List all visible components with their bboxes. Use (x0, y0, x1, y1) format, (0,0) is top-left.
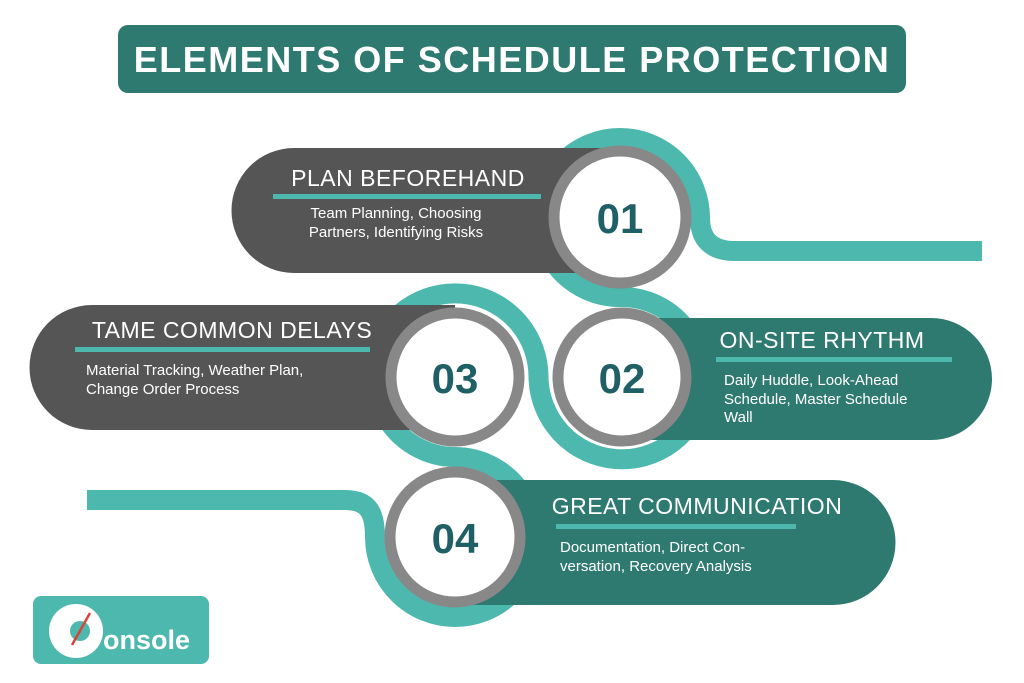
title (118, 25, 906, 93)
title: ELEMENTS OF SCHEDULE PROTECTION (134, 39, 890, 80)
panel: 02 on-site rhythm (622, 318, 992, 440)
panel: 04 great communication: GREAT COMMUNICATION (552, 493, 842, 519)
panel: 02 on-site rhythm: Daily Huddle, Look-Ahead (724, 372, 898, 389)
badge 04: 04 (432, 515, 479, 562)
badge 03: 03 (432, 355, 478, 402)
panel: 02 on-site rhythm: Wall (724, 409, 753, 426)
panel: 03 tame common delays (30, 305, 455, 430)
panel: 01 plan beforehand: Team Planning, Choosing (311, 205, 481, 222)
ribbon (87, 138, 982, 617)
logo (33, 596, 209, 664)
panel: 03 tame common delays: Change Order Process (86, 381, 239, 398)
panel: 02 on-site rhythm: ON-SITE RHYTHM (719, 327, 925, 353)
badge 04 (390, 472, 520, 602)
panel: 01 plan beforehand: Partners, Identifying Risks (309, 224, 483, 241)
panel: 01 plan beforehand: PLAN BEFOREHAND (291, 165, 525, 191)
panel: 03 tame common delays: TAME COMMON DELAYS (92, 317, 372, 343)
panel: 04 great communication: Documentation, Direct Con- (560, 539, 745, 556)
badge 01 (554, 151, 686, 283)
logo: onsole (103, 625, 190, 655)
badge 01: 01 (597, 195, 643, 242)
panel: 01 plan beforehand (232, 148, 620, 273)
panel: 02 on-site rhythm: Schedule, Master Schedule (724, 391, 907, 408)
panel: 04 great communication (455, 480, 896, 605)
badge 03 (391, 313, 519, 441)
badge 02: 02 (599, 355, 645, 402)
panel: 04 great communication: versation, Recovery Analysis (560, 558, 752, 575)
badge 02 (558, 313, 686, 441)
panel: 03 tame common delays: Material Tracking, Weather Plan, (86, 362, 303, 379)
